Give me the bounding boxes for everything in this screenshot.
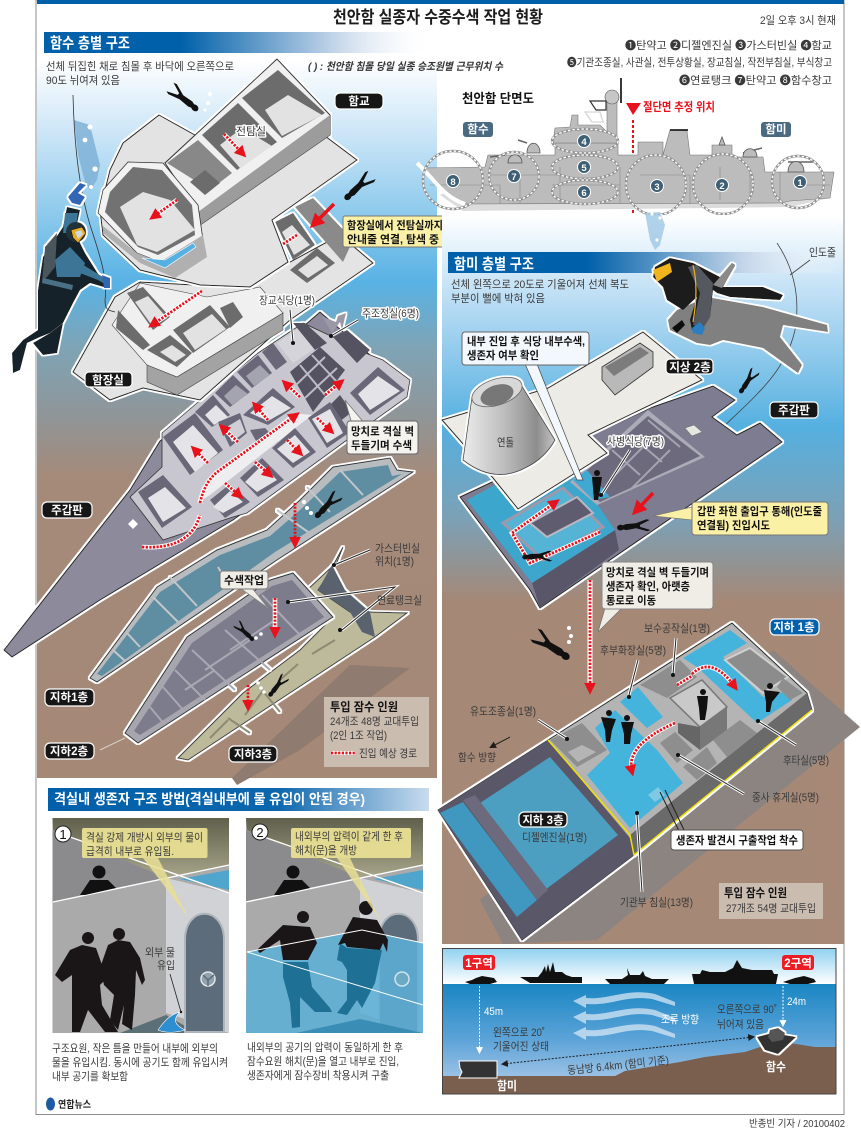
arrows bow upper xyxy=(152,134,334,325)
bow and stern badges: 함미 xyxy=(765,122,787,136)
back row rooms xyxy=(163,323,327,475)
heading bar: stern xyxy=(448,252,843,273)
water xyxy=(442,984,836,1094)
bow description: 선체 뒤집힌 채로 침몰 후 바닥에 오른쪽으로 xyxy=(46,60,234,73)
scene 1 caption: 내부 공기를 확보함 xyxy=(52,1070,128,1083)
bow wave cut xyxy=(417,163,465,204)
interior box xyxy=(530,497,593,537)
scene 2 caption xyxy=(247,1040,403,1082)
callout: enter dining: 생존자 여부 확인 xyxy=(467,348,539,362)
sky xyxy=(442,948,836,984)
number 2 xyxy=(252,824,268,840)
silhouette: rescuers xyxy=(55,928,145,1032)
zone labels xyxy=(463,955,814,970)
diesel engine room xyxy=(438,740,634,940)
floor: basement 3 xyxy=(178,547,407,760)
white edges xyxy=(53,837,229,902)
callout: hammer on wall xyxy=(345,400,418,454)
room labels: stern basement: 후타실(5명) xyxy=(783,754,829,767)
wreck: bow xyxy=(757,1028,796,1054)
scene 2 caption: 잠수요원 해치(문)을 열고 내부로 진입, xyxy=(247,1054,399,1068)
cabin block frame xyxy=(130,323,410,540)
panel: bow floor structure xyxy=(4,32,504,785)
long cabin block xyxy=(165,59,330,225)
back window xyxy=(52,830,167,902)
hull xyxy=(424,130,834,204)
cross section title: 천안함 단면도 xyxy=(462,91,534,106)
yellow line xyxy=(548,710,812,855)
label tags: bow: 함장실 xyxy=(92,373,124,387)
front wall xyxy=(630,693,812,855)
tags: stern upper: 지상 2층 xyxy=(669,361,711,374)
callout: enter dining xyxy=(462,332,589,480)
callout: hammer survivors: 망치로 격실 벽 두들기며 xyxy=(606,565,709,579)
bow and stern badges: 함수 xyxy=(467,122,489,136)
bow note xyxy=(717,1003,777,1031)
section numbers: 8 xyxy=(450,177,456,188)
water room xyxy=(467,450,615,583)
callout: hammer survivors: 생존자 확인, 아랫층 xyxy=(606,579,690,593)
bow and stern badges xyxy=(463,122,791,137)
floor water xyxy=(296,1019,423,1033)
room labels: stern basement: 디젤엔진실(1명) xyxy=(522,831,587,844)
room: workshop xyxy=(640,660,697,698)
figures in basement xyxy=(601,683,780,744)
number 2: 2 xyxy=(256,825,264,840)
callout: port entrance: 연결됨) 진입시도 xyxy=(697,519,770,532)
icon: diver main deck xyxy=(311,490,343,522)
section numbers: 5 xyxy=(581,163,587,174)
ceiling xyxy=(52,818,229,878)
rooms xyxy=(116,198,353,367)
scene 2 caption: 생존자에게 잠수장비 착용시켜 구출 xyxy=(247,1069,389,1082)
hatch xyxy=(685,425,702,436)
bubbles: basement three xyxy=(256,681,266,694)
box: divers stern xyxy=(719,883,823,919)
bow note: 오른쪽으로 90˚ xyxy=(717,1003,777,1016)
icon: diver basement three xyxy=(265,673,290,699)
hatch xyxy=(128,519,138,529)
icon: funnel xyxy=(463,372,555,475)
funnel label: 연돌 xyxy=(497,436,514,449)
water jet xyxy=(158,1012,185,1032)
room labels: bow: 주조정실(6명) xyxy=(362,307,419,320)
guide rope xyxy=(612,243,836,528)
callout: hammer survivors xyxy=(598,562,713,632)
depth arrows: 45m xyxy=(484,1006,503,1018)
label tags: bow xyxy=(42,93,383,762)
front wall xyxy=(532,530,619,608)
cross section legend: ❻연료탱크 ❼탄약고 ❽함수창고 xyxy=(679,73,832,87)
silhouette: back xyxy=(80,866,116,895)
tags: stern basement xyxy=(519,619,819,827)
inner block rooms xyxy=(218,388,295,452)
scene 1 caption xyxy=(52,1042,228,1083)
callout: captain to radar room xyxy=(343,216,447,247)
callout: survivor rescue: 생존자 발견시 구출작업 착수 xyxy=(676,833,798,847)
heading bar: rescue: 격실내 생존자 구조 방법(격실내부에 물 유입이 안된 경우) xyxy=(54,791,365,807)
right wall xyxy=(166,878,229,1033)
door xyxy=(379,914,418,1032)
room: guidance xyxy=(550,723,607,767)
top jag xyxy=(322,313,346,333)
icon: bubbles under ship xyxy=(645,212,665,250)
current label: 조류 방향 xyxy=(661,1013,699,1026)
ships on surface xyxy=(465,960,816,984)
label tags: bow: 지하3층 xyxy=(234,748,272,761)
distance label: 동남방 6.4km (함미 기준) xyxy=(567,1054,669,1077)
cross section legend xyxy=(567,38,832,87)
number 1 xyxy=(55,826,71,842)
section numbers: 3 xyxy=(654,182,660,193)
scene 1 caption: 물을 유입시킴. 동시에 공기도 함께 유입시켜 xyxy=(52,1056,228,1069)
tag connector: basement 2 xyxy=(100,738,125,750)
depth arrows xyxy=(480,986,806,1052)
room labels: bow: 위치(1명) xyxy=(375,555,414,568)
bubbles bridge diver xyxy=(204,92,212,112)
central tower xyxy=(670,680,727,727)
panel: cross section xyxy=(417,38,834,221)
arrows stern upper xyxy=(512,493,653,563)
silhouette: rescuers top xyxy=(257,901,388,960)
label: enlisted mess xyxy=(599,435,664,497)
section rings xyxy=(423,129,824,215)
icon: diver in water room xyxy=(522,551,552,562)
block top frame xyxy=(112,283,283,377)
section numbers: 1 xyxy=(797,178,803,189)
tags: stern basement: 지하 3층 xyxy=(522,814,564,827)
scene note xyxy=(291,828,411,858)
section numbers xyxy=(446,134,806,199)
callout: enter dining: 내부 진입 후 식당 내부수색, xyxy=(467,334,585,348)
arrows: lower stern xyxy=(590,580,735,772)
scene note: 해치(문)을 개방 xyxy=(295,843,357,857)
right wall xyxy=(360,878,423,1033)
timestamp: 2일 오후 3시 현재 xyxy=(760,13,836,27)
section numbers: 6 xyxy=(581,188,587,199)
room labels: stern basement: 유도조종실(1명) xyxy=(470,705,536,718)
floor hatch xyxy=(648,787,665,802)
callout: captain to radar room: 함장실에서 전탐실까지 xyxy=(347,218,443,232)
section numbers: 7 xyxy=(511,172,517,183)
room labels: bow: 가스터빈실 xyxy=(375,542,420,555)
label tags: bow: 주갑판 xyxy=(51,504,83,517)
callout: hammer on wall: 망치로 격실 벽 xyxy=(351,424,414,438)
box: divers stern: 투입 잠수 인원 xyxy=(724,886,787,900)
octagon lower wall xyxy=(103,226,207,278)
room: aft xyxy=(167,140,232,195)
bubbles: basement two xyxy=(254,632,263,640)
panel background xyxy=(37,60,437,778)
side rooms xyxy=(713,720,757,757)
superstructure and mast xyxy=(553,100,617,143)
box: divers stern: 27개조 54명 교대투입 xyxy=(726,902,816,915)
figures on stern deck xyxy=(592,470,602,500)
water line xyxy=(247,930,423,1005)
tags: stern upper xyxy=(666,359,818,418)
room labels: stern basement: 함수 방향 xyxy=(458,751,496,764)
room: forward xyxy=(242,70,325,138)
block side wall xyxy=(147,313,283,395)
forward dark room cluster xyxy=(290,330,405,425)
callout: hammer on wall: 두들기며 수색 xyxy=(351,438,412,452)
main deck plate xyxy=(4,312,405,657)
main water floor xyxy=(587,710,683,828)
guide line xyxy=(73,95,115,312)
beam from note xyxy=(337,858,380,920)
agency logo xyxy=(46,1098,91,1111)
wreck: stern xyxy=(459,1061,497,1078)
cut mark label xyxy=(626,100,715,221)
zone labels: 2구역 xyxy=(784,957,812,970)
callout: port entrance xyxy=(653,502,828,535)
water label: 유입 xyxy=(157,959,175,972)
room labels: bow: 연료탱크실 xyxy=(377,594,422,607)
scene note: 급격히 내부로 유입됨. xyxy=(86,844,174,858)
cross section legend: ❶탄약고 ❷디젤엔진실 ❸가스터빈실 ❹함교 xyxy=(625,38,832,52)
icon: diver basement two xyxy=(233,620,257,644)
lower row rooms xyxy=(210,402,350,518)
main deck stern xyxy=(460,386,782,608)
upper deck level 2 xyxy=(442,332,702,509)
label: enlisted mess: 사병식당(7명) xyxy=(607,435,664,448)
tags: stern upper: 주갑판 xyxy=(778,404,810,417)
bubbles: basement one xyxy=(302,500,313,515)
distance arrow xyxy=(503,1037,753,1064)
upper water strip xyxy=(683,630,792,723)
bow note: 뉘어져 있음 xyxy=(717,1018,764,1031)
cabin block xyxy=(570,410,705,505)
water overlay xyxy=(246,930,423,1033)
shadow under lower decks xyxy=(232,665,410,785)
silhouette: back xyxy=(274,866,310,895)
submerged legs xyxy=(283,943,382,1028)
panel: stern floor structure xyxy=(438,212,860,944)
heading bar: bow: 함수 층별 구조 xyxy=(50,35,130,52)
hull frame lines xyxy=(430,167,830,204)
floor xyxy=(120,1015,197,1033)
room labels: bow: 장교식당(1명) xyxy=(259,294,315,307)
icon: diver near callout xyxy=(530,628,574,665)
room labels: stern basement: 보수공작실(1명) xyxy=(644,622,710,635)
white edges xyxy=(246,837,423,902)
octagon room xyxy=(98,162,203,262)
byline: 반종빈 기자 / 20100402 xyxy=(749,1118,845,1130)
panel: sea diagram xyxy=(442,948,836,1094)
current arrows xyxy=(573,992,675,1040)
water room frame xyxy=(503,488,603,560)
floor: main deck xyxy=(4,312,410,657)
bubbles: stern callout xyxy=(567,626,573,644)
beam from note xyxy=(143,858,188,917)
room labels: bow: 전탐실 xyxy=(236,125,266,138)
floor: basement 1 xyxy=(90,458,413,682)
number 1: 1 xyxy=(59,827,67,842)
windows xyxy=(142,243,196,268)
room labels: stern basement xyxy=(458,622,829,909)
stern note: 왼쪽으로 20˚ xyxy=(493,1025,545,1039)
callout: search work: 수색작업 xyxy=(224,574,264,587)
main guns xyxy=(490,140,813,162)
bow description: 90도 뉘여져 있음 xyxy=(46,74,120,87)
submerged wheel xyxy=(395,972,409,986)
cut mark label: 절단면 추정 위치 xyxy=(643,100,715,114)
scene 1 caption: 구조요원, 작은 틈을 만들어 내부에 외부의 xyxy=(52,1042,218,1055)
icon: bubbles near main diver xyxy=(74,120,100,190)
label tags: bow: 함교 xyxy=(348,94,370,108)
box: divers bow: 진입 예상 경로 xyxy=(359,747,417,760)
icon: large diver xyxy=(12,183,110,373)
legend note: ( ) : 천안함 침몰 당일 실종 승조원별 근무위치 수 xyxy=(308,61,504,73)
depth arrows: 24m xyxy=(787,996,806,1008)
box: divers bow: 24개조 48명 교대투입 xyxy=(330,715,419,728)
box room xyxy=(725,648,788,693)
scene note: 격실 강제 개방시 외부의 물이 xyxy=(86,831,203,844)
bow description xyxy=(46,60,234,87)
deck box xyxy=(602,343,653,395)
ceiling xyxy=(246,818,423,878)
front rooms xyxy=(138,475,192,528)
wreck label: bow: 함수 xyxy=(766,1059,786,1074)
icon: diver near bow deck xyxy=(341,170,376,204)
zone labels: 1구역 xyxy=(465,957,493,970)
box: divers bow xyxy=(324,697,429,767)
scene note xyxy=(82,828,208,858)
stern panel background xyxy=(442,215,844,944)
floor: stern basement plate xyxy=(438,623,812,940)
title: 천안함 실종자 수중수색 작업 현황 xyxy=(333,8,543,27)
label tags: bow: 지하1층 xyxy=(50,691,88,704)
tags: stern basement: 지하 1층 xyxy=(773,621,815,634)
section numbers: 2 xyxy=(719,181,725,192)
scene 2 xyxy=(246,818,423,1033)
arrows main deck xyxy=(142,382,341,707)
callout: survivor rescue xyxy=(660,790,803,850)
icon: diver near entrance xyxy=(617,519,651,534)
guide rope: 인도줄 xyxy=(809,246,836,259)
heading bar: rescue xyxy=(48,788,429,811)
room labels: stern basement: 후부화장실(5명) xyxy=(600,644,666,657)
stern description: 부분이 뻘에 박혀 있음 xyxy=(451,292,545,305)
water label: 외부 물 xyxy=(145,946,175,959)
panel: rescue method xyxy=(48,788,429,1083)
panel border xyxy=(442,948,836,1094)
label tags: bow: 지하2층 xyxy=(50,745,88,758)
callout: search work xyxy=(220,571,268,608)
callout: captain to radar room: 안내줄 연결, 탐색 중 xyxy=(347,232,439,246)
room labels: stern basement: 중사 휴게실(5명) xyxy=(752,791,819,804)
agency logo: 연합뉴스 xyxy=(58,1098,91,1111)
callout: port entrance: 갑판 좌현 출입구 통해(인도줄 xyxy=(697,504,822,518)
stern note xyxy=(493,1025,549,1053)
wreck label: stern: 함미 xyxy=(497,1078,517,1093)
scene 1 xyxy=(52,818,229,1033)
scene 2 caption: 내외부의 공기의 압력이 동일하게 한 후 xyxy=(247,1040,403,1054)
label bridge deck xyxy=(98,59,357,287)
icon: large stern diver xyxy=(653,258,828,373)
corner room xyxy=(777,678,803,700)
floor: basement 2 xyxy=(125,573,333,743)
room: radar xyxy=(202,103,277,170)
callout: hammer survivors: 통로로 이동 xyxy=(606,594,656,607)
box: divers bow: (2인 1조 작업) xyxy=(330,729,387,742)
stern description: 선체 왼쪽으로 20도로 기울어져 선체 복도 xyxy=(451,277,629,291)
water: washroom xyxy=(620,687,663,728)
heading bar: stern: 함미 층별 구조 xyxy=(454,256,534,273)
back window xyxy=(246,830,361,902)
room labels: stern basement: 기관부 침실(13명) xyxy=(620,896,693,909)
icon: diver near bridge xyxy=(166,82,202,115)
room labels: bow xyxy=(236,125,422,632)
water label xyxy=(145,946,182,1013)
waterline band xyxy=(440,190,830,211)
heading bar: bow xyxy=(44,32,434,53)
stern description xyxy=(451,277,629,305)
icon: diver near deck xyxy=(736,367,760,396)
section numbers: 4 xyxy=(581,137,587,148)
scene note: 내외부의 압력이 같게 한 후 xyxy=(295,830,403,843)
seabed xyxy=(442,1043,836,1094)
bridge lower deck: captain quarters xyxy=(73,198,373,400)
door xyxy=(185,914,224,1032)
stern shadow xyxy=(480,650,860,944)
stern note: 기울어진 상태 xyxy=(493,1040,549,1053)
upper deck plate xyxy=(100,100,357,287)
box: divers bow: 투입 잠수 인원 xyxy=(330,700,398,714)
corridor xyxy=(197,413,312,503)
ship silhouette xyxy=(417,78,834,211)
